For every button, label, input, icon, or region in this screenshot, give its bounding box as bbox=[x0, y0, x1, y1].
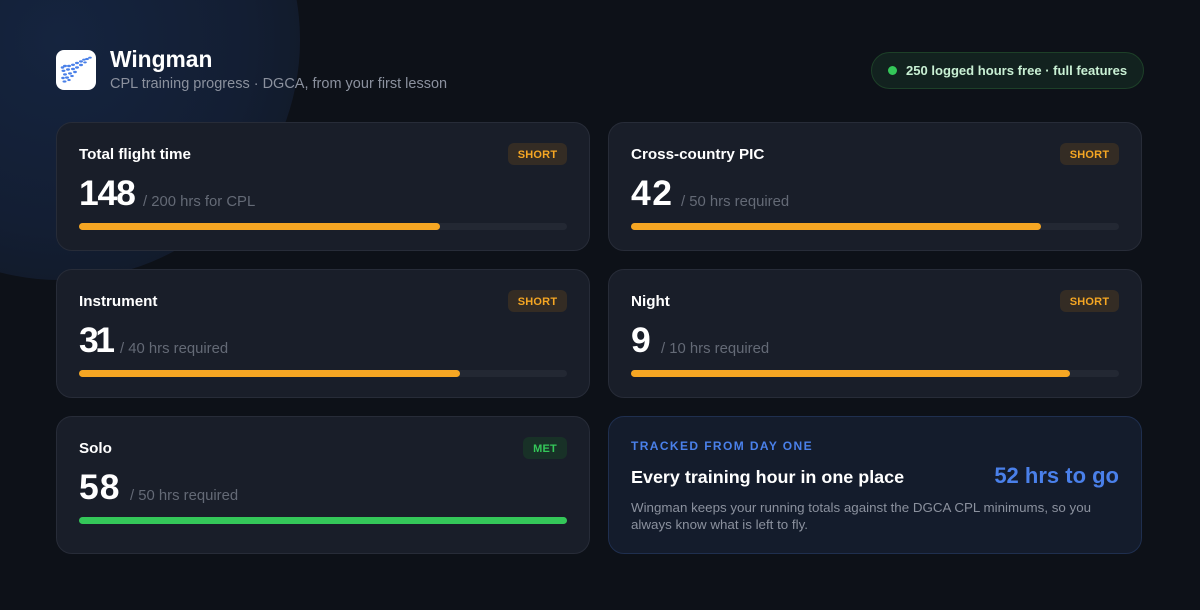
progress bar bbox=[631, 223, 1119, 230]
progress bar bbox=[79, 517, 567, 524]
icon: status dot bbox=[888, 66, 897, 75]
label: Night bbox=[631, 293, 670, 310]
label: Cross-country PIC bbox=[631, 146, 764, 163]
pill text: 250 logged hours free · full features bbox=[906, 63, 1127, 78]
progress bar bbox=[79, 223, 567, 230]
badge bbox=[508, 290, 567, 312]
badge bbox=[523, 437, 567, 459]
requirement: / 40 hrs required bbox=[120, 341, 228, 357]
value: 31 bbox=[79, 320, 112, 360]
panel: night bbox=[608, 269, 1142, 398]
badge: SHORT bbox=[518, 149, 557, 161]
icon: Wingman logo bbox=[56, 50, 96, 90]
requirement: / 200 hrs for CPL bbox=[143, 194, 255, 210]
label: Total flight time bbox=[79, 146, 191, 163]
heading: Every training hour in one place bbox=[631, 467, 904, 487]
requirement: / 50 hrs required bbox=[130, 488, 238, 504]
panel: instrument bbox=[56, 269, 590, 398]
header: brand bbox=[56, 46, 447, 92]
badge: SHORT bbox=[1070, 149, 1109, 161]
value: 42 bbox=[631, 173, 674, 213]
requirement: / 50 hrs required bbox=[681, 194, 789, 210]
panel: solo bbox=[56, 416, 590, 554]
background glow bbox=[0, 0, 300, 280]
eyebrow: TRACKED FROM DAY ONE bbox=[631, 439, 813, 453]
badge bbox=[1060, 143, 1119, 165]
requirement: / 10 hrs required bbox=[661, 341, 769, 357]
status pill bbox=[871, 52, 1144, 89]
badge: SHORT bbox=[518, 296, 557, 308]
value: 58 bbox=[79, 467, 120, 507]
progress bar bbox=[631, 370, 1119, 377]
hours remaining: 52 hrs to go bbox=[994, 463, 1119, 488]
badge bbox=[1060, 290, 1119, 312]
panel: total flight time bbox=[56, 122, 590, 251]
badge: MET bbox=[533, 443, 557, 455]
badge bbox=[508, 143, 567, 165]
panel: cross-country PIC bbox=[608, 122, 1142, 251]
progress bar bbox=[79, 370, 567, 377]
label: Solo bbox=[79, 440, 112, 457]
subtitle: CPL training progress · DGCA, from your first lesson bbox=[110, 76, 447, 92]
description: Wingman keeps your running totals against the DGCA CPL minimums, so you always know what is left to fly. bbox=[631, 500, 1091, 532]
title: Wingman bbox=[110, 46, 212, 72]
label: Instrument bbox=[79, 293, 157, 310]
panel: tracked from day one bbox=[608, 416, 1142, 554]
value: 9 bbox=[631, 320, 651, 360]
badge: SHORT bbox=[1070, 296, 1109, 308]
value: 148 bbox=[79, 173, 135, 213]
